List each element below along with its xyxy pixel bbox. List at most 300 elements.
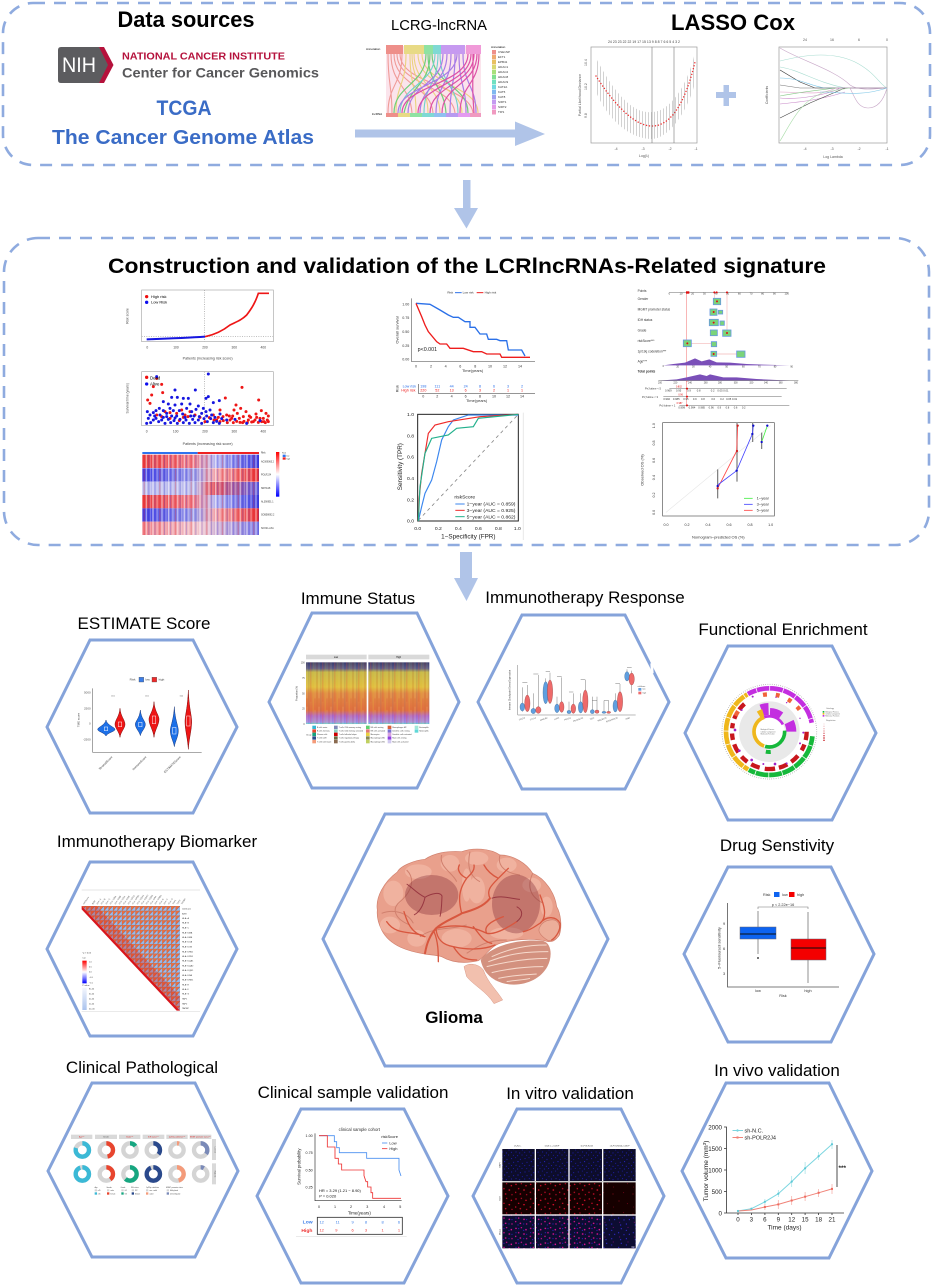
text: Glioma: Glioma [425,1008,483,1027]
chart: circular GO enrichment: Cellular Component [761,730,776,733]
chart: ROC curves: 0.0 [407,519,414,525]
panel: construction and validation [4,238,929,545]
dashed frame: signature box [4,238,929,545]
chart: donut grid: codel [149,1193,154,1195]
chart: LCRG-lncRNA alluvial: Annotation [491,45,506,49]
chart: ROC curves: 0.4 [407,476,414,482]
heading: construction and validation: Construction and validation of the LCRlncRNAs-Related signature [108,254,826,278]
logo: NIH National Cancer Institute: NIH [62,54,96,77]
hexagon frame [323,814,608,1066]
chart: stacked immune cell proportions: Group [306,733,312,736]
chart: Kaplan-Meier overall survival: 14 [518,364,522,368]
chart: LCRG-lncRNA alluvial: KAT5 [498,90,506,94]
chart: correlation triangle heatmap: HLA−DQA1 [136,894,145,905]
chart: donut grid: Gender [106,1187,112,1189]
chart: donut grid: 1p/19q codeletion [146,1186,159,1189]
chart: survival time scatter [125,372,273,446]
chart: survival time scatter: 0 [146,430,148,434]
chart: LASSO deviance curve: Log(λ) [639,154,649,158]
panel: immunotherapy response [478,588,685,789]
chart: correlation triangle heatmap: 2e-04 [89,1004,95,1006]
chart: risk score curve: 100 [173,346,179,350]
chart: correlation triangle heatmap: HLA−DRB1 [182,979,194,982]
chart: nomogram: 260 [704,382,708,384]
chart: circular GO enrichment: Ontology [826,707,834,710]
chart: correlation triangle heatmap: riskScore [182,907,192,910]
chart: Kaplan-Meier overall survival: 0.50 [402,330,409,334]
chart: correlation triangle heatmap: HLA−DPA1 [182,950,194,953]
chart: ROC curves: 0.2 [407,497,414,503]
chart: Kaplan-Meier overall survival: Risk [447,291,454,295]
chart: LASSO deviance curve: 9.8 [584,113,588,118]
chart: stacked immune cell proportions: Mast cells activated [392,740,408,743]
chart: calibration curve: 0.2 [652,492,656,498]
chart: clinical cohort survival: 12 [319,1227,325,1232]
chart: nomogram: Pr( futime < 3 [642,395,659,399]
chart: nomogram: 280 [718,382,723,384]
chart: LASSO coefficient paths: 24 [803,38,807,42]
chart: stacked immune cell proportions: T cells CD4 memory resting [339,726,361,729]
chart: correlation triangle heatmap: 0.0 [89,972,93,974]
chart: stacked immune cell proportions: Low [334,657,338,659]
chart: risk heatmap [142,452,290,535]
chart: nomogram: 40 [715,291,718,295]
chart: stacked immune cell proportions: Mast cells resting [392,737,406,740]
chart: risk score curve: Patients (increasing risk score) [183,356,233,360]
chart: donut grid: MGMT promoter status [166,1186,183,1189]
chart: Kaplan-Meier overall survival: 0.75 [402,316,409,320]
chart: donut grid: Mutant [135,1192,141,1195]
table: numbers at risk: Low risk [403,384,416,388]
chart: clinical cohort survival [296,1127,407,1236]
table: numbers at risk [396,384,535,403]
chart: risk score curve [125,290,273,360]
chart: ROC curves: 0.2 [435,526,442,532]
chart: correlation triangle heatmap: HLA−DQB1 [145,894,154,905]
chart: calibration curve: 5−year [757,508,770,513]
chart: stacked immune cell proportions: NK cells activated [371,730,385,733]
chart: correlation triangle heatmap: 8e-04 [89,989,95,991]
chart: clinical cohort survival: 8 [382,1219,385,1224]
chart: LCRG-lncRNA alluvial: HDAC8 [498,75,509,79]
icon: plus sign [716,85,736,106]
chart: survival time scatter: 200 [202,430,208,434]
chart: clinical cohort survival: 1 [334,1205,336,1209]
image grid: EdU fluorescence: sh-POLR2J4+CDDP [610,1146,630,1148]
chart: nomogram: 0.969 0.95 0.9 0.8 0.2 0.05 0.01 [665,389,729,393]
chart: risk score curve: 300 [232,346,237,350]
panel: clinical sample validation [257,1083,448,1283]
chart: tumor volume line chart: Tumor volume (mm [703,1145,710,1201]
chart: risk heatmap: high [286,458,290,460]
chart: correlation triangle heatmap: HLA−B [100,897,107,905]
panel: functional enrichment [685,620,876,820]
chart: correlation triangle heatmap: TAP2 [182,1002,188,1005]
chart: survival time scatter: Dead [150,375,161,380]
chart: correlation triangle heatmap: HLA−F [182,988,189,991]
chart: risk heatmap: AL390951.1 [261,500,274,503]
image grid: EdU fluorescence: Merge [498,1228,501,1235]
chart: stacked immune cell proportions: T cells CD8 [317,738,326,740]
chart: correlation triangle heatmap: HLA−DOB [182,945,193,948]
chart: correlation triangle heatmap: TAPBP [182,1007,189,1010]
chart: risk score curve: Low Risk [151,300,167,305]
chart: clinical cohort survival: 4 [383,1205,385,1209]
chart: tumor volume line chart: 15 [802,1216,809,1224]
chart: tumor volume line chart: 3 [702,1142,707,1145]
chart: nomogram: IDH status [638,318,653,322]
chart: stacked immune cell proportions: T cells regulatory (Tregs) [339,737,359,740]
chart: nomogram: 70 [750,291,753,295]
chart: Kaplan-Meier overall survival: 0.25 [402,344,409,348]
chart: LCRG-lncRNA alluvial: HDAC2 [498,70,509,74]
arrow: top box to signature box [454,180,478,228]
image grid: EdU fluorescence [498,1146,636,1248]
chart: tumor volume line chart [702,1124,847,1232]
chart: correlation triangle heatmap: P value [82,985,90,987]
text: TCGA: TCGA [156,97,212,120]
chart: stacked immune cell proportions: 75 [302,678,305,680]
chart: correlation triangle heatmap: HLA−DQA2 [182,964,194,967]
chart: calibration curve: 0.4 [705,523,711,527]
chart: 5-fluorouracil boxplot: Risk [763,893,770,897]
chart: LCRG-lncRNA alluvial: SIRT2 [498,105,507,109]
panel: clinical pathological [48,1058,238,1257]
chart: 5-fluorouracil boxplot: Risk [779,994,787,998]
panel: glioma [323,814,608,1066]
chart: clinical cohort survival: 6 [352,1227,355,1232]
chart: clinical cohort survival: 0.25 [306,1185,313,1189]
chart: checkpoint gene violins: SIGLEC15 [597,717,608,723]
chart: clinical cohort survival: P = 0.020 [319,1193,337,1198]
chart: violin plot: StromalScore [98,755,114,771]
chart: Kaplan-Meier overall survival: Overall survival [395,316,400,344]
chart: LASSO deviance curve: 24 23 23 22 22 19 17 15 13 9 8 8 7 6 6 5 4 3 2 [608,40,680,44]
chart: survival time scatter: Alive [150,382,160,387]
chart: LASSO coefficient paths: 6 [858,38,860,42]
chart: correlation triangle heatmap: HLA−A [182,917,189,920]
chart: donut grid: Age [95,1186,98,1189]
chart: risk heatmap: AC009065.2 [261,461,275,464]
chart: nomogram: 240 [688,382,693,384]
chart: donut grid: male [110,1190,114,1192]
chart: LASSO deviance curve [578,40,698,158]
chart: tumor volume line chart: sh-POLR2J4 [744,1136,776,1142]
chart: checkpoint gene violins: LAG3 [554,716,561,721]
hexagon frame [48,1083,238,1257]
chart: Kaplan-Meier overall survival: 8 [474,364,476,368]
chart: Kaplan-Meier overall survival: Time(years) [462,368,484,373]
chart: risk heatmap: low [286,456,290,458]
chart: nomogram: MGMT promoter status [638,307,670,311]
hexagon frame [682,1083,872,1258]
chart: LCRG-lncRNA alluvial: KAT8 [498,95,506,99]
chart: stacked immune cell proportions: Eosinophils [419,727,429,729]
chart: checkpoint gene violins: TIGIT [590,717,596,721]
chart: nomogram: 0.802 [676,386,683,388]
chart: donut grid: Age*** [79,1136,85,1139]
chart: clinical cohort survival: 1.00 [306,1134,313,1138]
chart: nomogram: 80 [761,291,765,295]
chart: risk heatmap: POLR2J4 [261,475,272,477]
chart: 5-fluorouracil boxplot [718,892,839,998]
chart: clinical cohort survival: High [389,1146,398,1151]
chart: calibration curve: 0.6 [652,458,656,463]
chart: 5-fluorouracil boxplot: high [797,893,804,897]
chart: circular GO enrichment: Molecular Function [761,733,775,736]
chart: Kaplan-Meier overall survival: p<0.001 [418,347,437,353]
chart: LCRG-lncRNA alluvial: HDAC9 [498,80,509,84]
chart: tumor volume line chart: 6 [763,1216,767,1224]
chart: violin plot: -2500 [83,737,91,741]
chart: nomogram: Pr( futime < 1 [659,404,676,408]
chart: Kaplan-Meier overall survival: 12 [503,364,507,368]
chart: LASSO coefficient paths: 16 [830,38,834,42]
chart: donut grid: 1p/19q codeletion*** [169,1136,186,1139]
chart: checkpoint gene violins: low [643,689,646,691]
chart: 5-fluorouracil boxplot: 5−Fluorouracil sensitivity [718,927,722,969]
chart: tumor volume line chart: 1000 [708,1168,723,1174]
chart: tumor volume line chart: ) [703,1141,710,1143]
chart: clinical cohort survival: 8 [365,1219,368,1224]
chart: checkpoint gene violins: HAVCR2 [540,716,548,722]
chart: tumor volume line chart: 9 [777,1216,781,1224]
panel: in vivo validation [682,1061,872,1258]
table: numbers at risk: 8 [479,384,481,388]
chart: clinical cohort survival: High [301,1228,312,1234]
chart: risk heatmap: Risk [282,453,286,455]
chart: correlation triangle heatmap: HLA−DQA2 [140,894,150,905]
chart: risk heatmap: SOB58092.2 [261,515,275,517]
table: numbers at risk: 2 [493,388,495,392]
chart: calibration curve: Nomogram−predicted OS (%) [692,534,745,539]
chart: donut grid: Gender [103,1137,109,1139]
chart: calibration curve: 1.0 [768,523,773,527]
chart: tumor volume line chart: 21 [829,1216,836,1224]
chart: clinical cohort survival: Low [303,1220,313,1226]
chart: LCRG-lncRNA alluvial: HDAC1 [498,65,509,69]
chart: calibration curve: 0.4 [652,475,656,480]
chart: donut grid: non−codel [149,1190,158,1192]
image grid: EdU fluorescence: DAPI [498,1162,501,1168]
chart: Kaplan-Meier overall survival: Low risk [463,291,474,295]
table: numbers at risk: 12 [506,394,510,398]
heading: immunotherapy biomarker: Immunotherapy Biomarker [57,832,257,851]
chart: calibration curve: 0.8 [652,440,656,446]
chart: correlation triangle heatmap: HLA−DQA1 [182,960,194,963]
logo: NIH National Cancer Institute: Center for Cancer Genomics [122,64,319,80]
chart: correlation triangle heatmap: HLA−B [182,922,189,925]
illustration: brain with tumours [377,849,561,1004]
table: numbers at risk: Time(years) [466,398,488,403]
chart: correlation triangle heatmap: HLA−A [96,897,102,905]
chart: donut grid: IDH status*** [148,1136,159,1139]
chart: ROC curves: 3−year (AUC = 0.925) [467,508,516,514]
chart: stacked immune cell proportions: Dendritic cells resting [392,730,410,733]
chart: stacked immune cell proportions: Plasma cells [317,734,327,736]
logo: NIH National Cancer Institute: NATIONAL CANCER INSTITUTE [122,50,285,62]
chart: correlation triangle heatmap: *p < 0.05 [82,951,92,954]
chart: calibration curve: 0.0 [652,510,656,515]
chart: donut grid: IDH status [131,1186,139,1189]
chart: donut grid: ≤45 [98,1190,100,1192]
chart: donut grid: Methylated [170,1189,178,1192]
chart: stacked immune cell proportions: Dendritic cells activated [392,733,412,736]
chart: checkpoint gene violins [509,663,652,723]
chart: nomogram: Age*** [638,360,648,364]
chart: donut grid: G2 [125,1190,127,1192]
chart: tumor volume line chart: 12 [788,1216,796,1224]
chart: 5-fluorouracil boxplot: 9 [723,922,725,926]
chart: correlation triangle heatmap: HLA−DMA [182,931,193,934]
chart: ROC curves: 0.8 [407,433,414,439]
chart: calibration curve: 3−year [757,502,770,507]
panel: immunotherapy biomarker [47,832,257,1036]
chart: nomogram: 50 [726,291,730,295]
chart: LASSO deviance curve: Partial Likelihood Deviance [578,74,582,116]
table: numbers at risk: 198 [420,384,426,388]
heading: LCRG-lncRNA: LCRG-lncRNA [391,17,487,34]
chart: correlation triangle heatmap: HLA−C [182,926,189,929]
chart: Kaplan-Meier overall survival: 0.00 [402,358,409,362]
chart: nomogram [638,289,799,410]
chart: stacked immune cell proportions: B cells memory [317,731,330,733]
arrow: signature box to analysis panels [454,552,478,601]
chart: nomogram: 50 [725,366,729,368]
chart: clinical cohort survival: 0.75 [306,1151,313,1155]
chart: donut grid: Unmethylated [170,1192,180,1195]
chart: correlation triangle heatmap: HLA−DPB1 [182,955,194,958]
chart: checkpoint gene violins: Immune Checkpoint Genes Expression [509,669,512,710]
table: numbers at risk: 6 [465,388,467,392]
chart: ROC curves: 0.6 [407,455,414,461]
chart: Kaplan-Meier overall survival: 0 [415,364,417,368]
chart: stacked immune cell proportions: Proportion (%) [296,686,299,701]
chart: stacked immune cell proportions: T cells CD4 naive [317,741,331,743]
table: numbers at risk: 2 [436,394,438,398]
chart: nomogram: 380 [794,382,799,384]
chart: LCRG-lncRNA alluvial: CSE1NP [498,50,510,54]
table: numbers at risk: 1 [521,388,523,392]
table: numbers at risk: 4 [451,394,453,398]
chart: ROC curves: 0.8 [495,526,502,532]
chart: risk heatmap: SOX21-AS1 [261,527,274,530]
chart: nomogram: 40 [709,366,712,368]
table: numbers at risk: 6 [465,394,467,398]
chart: correlation triangle heatmap: HLA−DPA1 [127,894,136,905]
chart: checkpoint gene violins: PDCD1 [564,717,571,722]
chart: stacked immune cell proportions: Macrophages M2 [392,727,406,729]
chart: LASSO coefficient paths: -1 [885,147,889,151]
chart: correlation triangle heatmap: TAPBP [180,897,187,905]
image grid: EdU fluorescence: sh-N.C. [514,1146,522,1148]
chart: nomogram: 300 [734,382,738,384]
table: numbers at risk: 3 [479,388,481,392]
chart: correlation triangle heatmap: 0.5 [89,966,93,968]
chart: LASSO coefficient paths: -4 [803,147,807,151]
chart: correlation triangle heatmap: 6e-04 [89,994,95,996]
chart: violin plot: *** [145,695,150,699]
heading: functional enrichment: Functional Enrichment [698,620,868,639]
chart: risk score curve: 0 [146,346,148,350]
chart: correlation triangle heatmap: −0.5 [89,977,94,979]
image grid: EdU fluorescence: EdU [499,1196,501,1200]
chart: tumor volume line chart: 3 [750,1216,754,1224]
table: numbers at risk: 52 [435,388,439,392]
image grid: EdU fluorescence: sh-N.C.+CDDP [545,1146,560,1148]
chart: correlation triangle heatmap: HLA−DOA [118,895,127,905]
chart: LCRG-lncRNA alluvial: SIRT1 [498,100,507,104]
chart: checkpoint gene violins: PDCD1LG2 [573,717,584,723]
chart: checkpoint gene violins: CTLA4 [530,716,537,721]
chart: tumor volume line chart: 2000 [708,1124,723,1132]
chart: risk heatmap: Risk [261,452,266,454]
chart: stacked immune cell proportions: 50 [302,693,305,695]
chart: nomogram: 60 [742,366,745,368]
chart: nomogram: Total points [638,369,656,373]
chart: correlation triangle heatmap: HLA−DMB [114,895,122,905]
chart: correlation triangle heatmap: HLA−DRB1 [154,894,163,905]
chart: correlation triangle heatmap: 4e-04 [89,999,95,1001]
chart: correlation triangle heatmap: HLA−F [163,897,169,905]
chart: nomogram: 220 [673,382,678,384]
chart: nomogram: 10 [680,291,683,295]
chart: clinical cohort survival: 6 [398,1219,401,1224]
chart: LASSO coefficient paths: Coefficients [765,86,769,104]
chart: circular GO enrichment [722,684,841,779]
chart: violin plot: high [159,678,165,682]
chart: tumor volume line chart: 0 [736,1216,740,1224]
chart: correlation triangle heatmap: HLA−G [182,993,189,996]
chart: stacked immune cell proportions: 0 [303,724,305,726]
chart: donut grid [71,1135,216,1195]
heading: drug sensitivity: Drug Senstivity [720,836,835,855]
chart: 5-fluorouracil boxplot: p < 2.22e−16 [772,903,794,907]
chart: clinical cohort survival: HR = 3.29 (1.21 − 8.90) [319,1188,362,1193]
chart: correlation triangle heatmap: HLA−C [105,897,111,905]
chart: circular GO enrichment: Cellular Component [825,712,841,715]
chart: checkpoint gene violins: VSIR [625,717,631,721]
chart: donut grid: >45 [98,1192,101,1195]
chart: LASSO deviance curve: -1 [694,147,698,151]
chart: nomogram: 30 [692,366,695,368]
heading: clinical pathological: Clinical Pathological [66,1058,218,1077]
chart: checkpoint gene violins: high [643,692,646,694]
chart: clinical cohort survival: 2 [350,1205,352,1209]
chart: risk score curve: 200 [202,346,208,350]
chart: correlation triangle heatmap: HLA−DOA [182,941,193,944]
chart: nomogram: Points [638,289,647,293]
chart: correlation triangle heatmap: HLA−G [167,897,174,905]
chart: correlation triangle heatmap: TAP2 [176,899,182,905]
table: numbers at risk: 220 [420,388,426,392]
panel: ESTIMATE score [47,614,237,813]
chart: violin plot: ImmuneScore [131,755,148,771]
chart: clinical cohort survival: riskScore [381,1134,399,1139]
chart: nomogram: 200 [658,382,663,384]
chart: ROC curves: 1.0 [514,526,521,532]
chart: checkpoint gene violins: IDO1/HAVCR [606,716,619,723]
chart: calibration curve: 0.2 [684,523,690,527]
chart: nomogram: 320 [749,382,754,384]
heading: immunotherapy response: Immunotherapy Response [485,588,685,607]
chart: calibration curve: 0.6 [726,523,732,527]
chart: LCRG-lncRNA alluvial: EFT1 [498,55,506,59]
chart: Kaplan-Meier overall survival [395,291,535,373]
chart: clinical cohort survival: 0 [318,1205,320,1209]
chart: nomogram: 60 [738,291,741,295]
chart: nomogram: 360 [779,382,783,384]
